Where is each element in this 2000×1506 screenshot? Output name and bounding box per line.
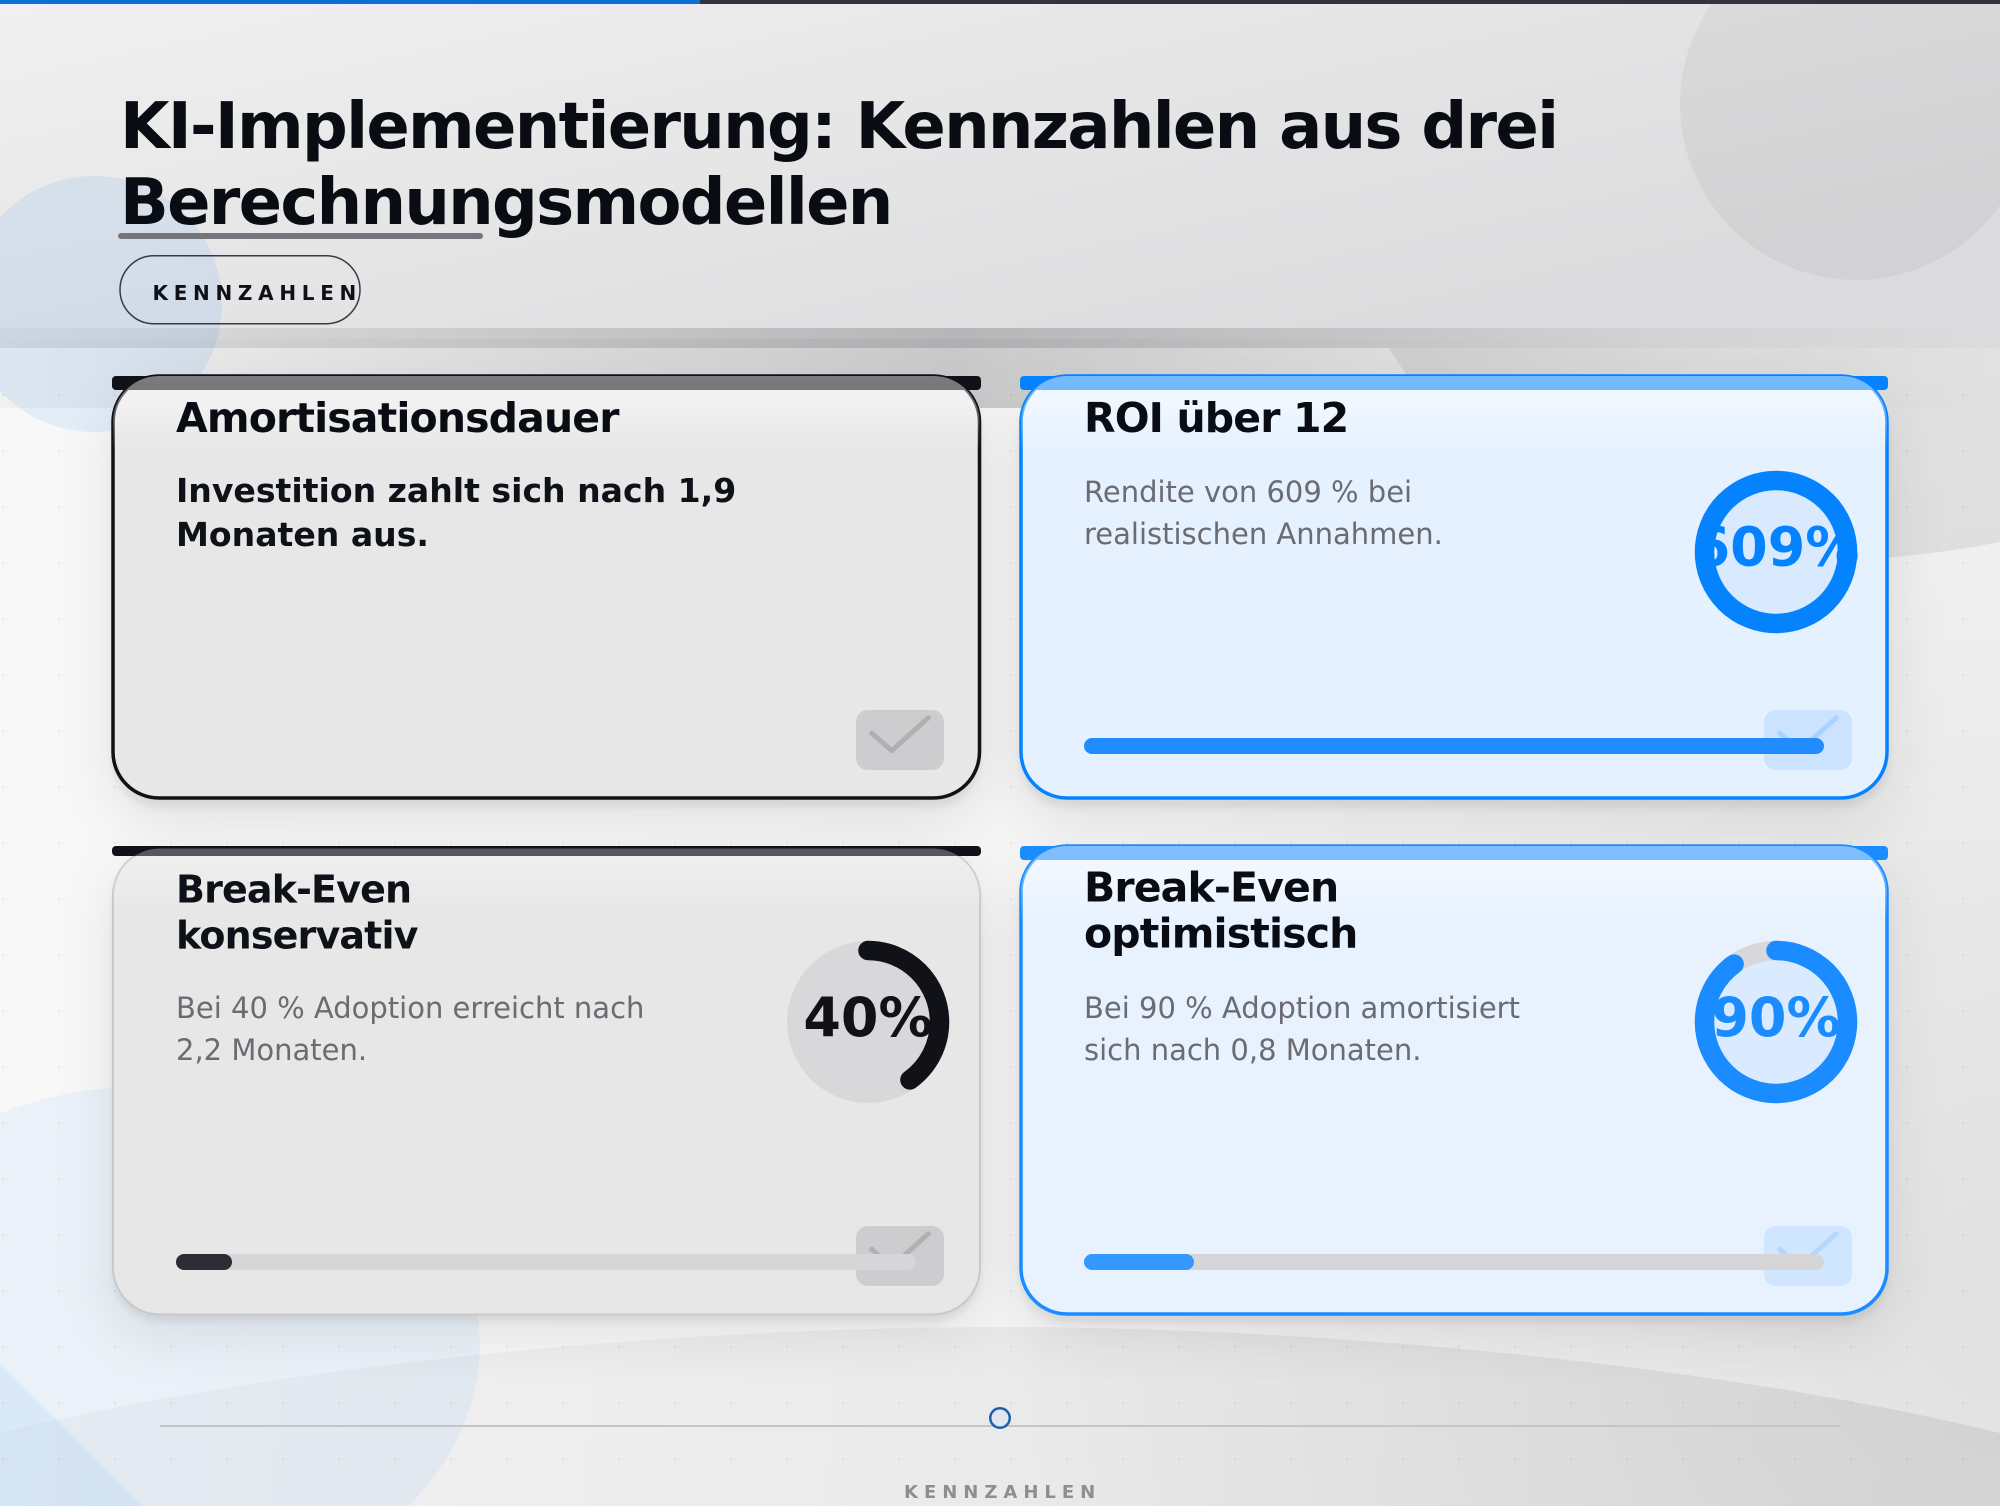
footer divider bbox=[160, 1425, 1840, 1427]
card heading: konservativ bbox=[176, 914, 419, 958]
icon: check badge bbox=[1764, 1226, 1852, 1286]
card description: Bei 90 % Adoption amortisiert bbox=[1084, 991, 1520, 1025]
header circle: top right bbox=[1680, 0, 2000, 280]
card heading: optimistisch bbox=[1084, 910, 1357, 958]
ring gauge: 90%: 90% bbox=[1711, 986, 1841, 1049]
card sheen bbox=[114, 848, 979, 888]
title underline bbox=[118, 233, 483, 239]
panel: Amortisationsdauer bbox=[112, 376, 981, 798]
card description: Rendite von 609 % bei bbox=[1084, 475, 1412, 509]
card description: Bei 40 % Adoption erreicht nach bbox=[176, 991, 644, 1025]
footer marker circle bbox=[990, 1408, 1010, 1428]
card heading bbox=[1084, 864, 1357, 958]
decorative shape: bottom ellipse bbox=[0, 1327, 2000, 1506]
card description bbox=[1084, 475, 1443, 551]
card statement bbox=[176, 471, 736, 554]
card statement: Investition zahlt sich nach 1,9 bbox=[176, 471, 736, 510]
card description: sich nach 0,8 Monaten. bbox=[1084, 1033, 1421, 1067]
ring gauge: 90% bbox=[1704, 950, 1848, 1094]
card description bbox=[176, 991, 644, 1067]
panel: Break-Even optimistisch bbox=[1019, 846, 1889, 1314]
header circle: left bbox=[0, 176, 222, 432]
header shadow band bbox=[0, 328, 2000, 408]
card accent bar bbox=[112, 376, 981, 390]
decorative blob: upper right bbox=[1370, 320, 2000, 559]
footer label: KENNZAHLEN bbox=[904, 1482, 1101, 1503]
ring gauge: 40% bbox=[787, 941, 949, 1103]
card accent bar bbox=[1020, 846, 1888, 860]
card heading bbox=[176, 868, 419, 958]
progress bar bbox=[1084, 738, 1824, 754]
panel: Break-Even konservativ bbox=[112, 846, 981, 1314]
panel: ROI über 12 bbox=[1019, 376, 1889, 798]
top progress bar bbox=[0, 0, 2000, 4]
card accent bar bbox=[112, 846, 981, 856]
card heading: Amortisationsdauer bbox=[176, 394, 620, 442]
badge pill bbox=[120, 256, 362, 324]
card description bbox=[1084, 991, 1520, 1067]
icon: check badge bbox=[856, 710, 944, 770]
card description: realistischen Annahmen. bbox=[1084, 517, 1443, 551]
card sheen bbox=[1019, 376, 1889, 450]
card shadows bbox=[112, 382, 1889, 1336]
progress bar bbox=[1084, 1254, 1824, 1270]
title bbox=[120, 90, 1557, 240]
card heading: Break-Even bbox=[1084, 864, 1338, 912]
card statement: Monaten aus. bbox=[176, 515, 429, 554]
badge pill: KENNZAHLEN bbox=[152, 281, 362, 305]
title: Berechnungsmodellen bbox=[120, 166, 892, 240]
dot pattern bbox=[0, 348, 2000, 1506]
title: KI-Implementierung: Kennzahlen aus drei bbox=[120, 90, 1557, 164]
decorative shape: lower left triangle bbox=[0, 1363, 143, 1506]
card heading: ROI über 12 bbox=[1084, 394, 1348, 442]
card sheen bbox=[1019, 846, 1889, 920]
card sheen bbox=[112, 376, 981, 450]
card description: 2,2 Monaten. bbox=[176, 1033, 367, 1067]
ring gauge: 609% bbox=[1693, 480, 1859, 624]
header panel bbox=[0, 0, 2000, 348]
card accent bar bbox=[1020, 376, 1888, 390]
card heading: Break-Even bbox=[176, 868, 411, 912]
ring gauge: 609%: 609% bbox=[1693, 516, 1859, 578]
progress bar bbox=[176, 1254, 916, 1270]
ring gauge: 40%: 40% bbox=[803, 986, 933, 1049]
icon: check badge bbox=[1764, 710, 1852, 770]
icon: check badge bbox=[856, 1226, 944, 1286]
decorative shape: lower left ellipse bbox=[0, 1086, 480, 1506]
